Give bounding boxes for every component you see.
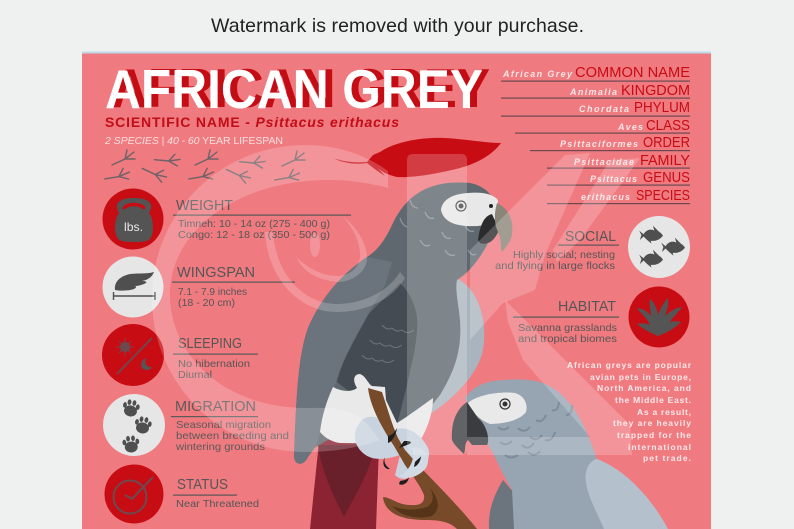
icon: habitat grass <box>628 286 690 348</box>
eye patch <box>467 392 527 424</box>
conservation paragraph: international <box>628 442 691 452</box>
taxonomy list: PHYLUM <box>634 99 690 116</box>
head scallops <box>400 200 476 255</box>
feet and branch <box>355 388 477 529</box>
beak <box>452 402 488 454</box>
foot <box>355 417 429 479</box>
weight text: Congo: 12 - 18 oz (350 - 500 g) <box>178 229 330 241</box>
watermark notice: Watermark is removed with your purchase. <box>211 15 584 37</box>
large parrot <box>294 182 512 529</box>
eye <box>500 399 510 409</box>
watermark K arm <box>470 153 590 340</box>
conservation paragraph: they are heavily <box>613 418 691 428</box>
icon: wingspan <box>102 256 164 318</box>
wingspan text: 7.1 - 7.9 inches <box>178 286 247 298</box>
watermark face <box>297 217 367 282</box>
eye <box>456 201 466 211</box>
tail inner <box>318 445 374 517</box>
pale wing <box>586 459 668 529</box>
white thigh <box>320 374 433 444</box>
sleeping text: Diurnal <box>178 369 212 381</box>
title: AFRICAN GREY <box>105 58 483 120</box>
tail <box>310 432 379 529</box>
nostril <box>489 204 493 208</box>
sleeping text: SLEEPING <box>178 335 242 352</box>
sleeping text <box>173 335 258 381</box>
branch <box>368 388 477 529</box>
icon: social fish <box>628 216 690 278</box>
social text: and flying in large flocks <box>495 260 615 272</box>
conservation paragraph: trapped for the <box>617 430 691 440</box>
conservation paragraph: pet trade. <box>643 453 691 463</box>
status text: Near Threatened <box>176 498 259 510</box>
icon: weight kettlebell <box>102 188 164 250</box>
title: AFRICAN GREY <box>112 57 490 119</box>
body <box>465 379 610 529</box>
conservation paragraph <box>567 360 692 463</box>
sleeping text: No hibernation <box>178 358 250 370</box>
migration text: MIGRATION <box>175 398 256 415</box>
claws <box>383 428 421 485</box>
status text <box>173 476 259 510</box>
social text <box>495 228 619 272</box>
watermark face ring <box>265 232 405 312</box>
wingspan text: (18 - 20 cm) <box>178 297 235 309</box>
outer wing <box>294 257 392 464</box>
weight text: WEIGHT <box>176 197 233 214</box>
panel background <box>82 52 711 529</box>
watermark overlay <box>152 145 640 455</box>
beak upper <box>495 203 512 252</box>
migration text: Seasonal migration <box>176 419 271 431</box>
social text: Highly social; nesting <box>513 249 615 261</box>
status text: STATUS <box>177 476 228 493</box>
migration text: between breeding and <box>176 430 289 442</box>
conservation paragraph: North America, and <box>597 383 691 393</box>
conservation paragraph: avian pets in Europe, <box>590 372 691 382</box>
habitat text: and tropical biomes <box>518 333 617 345</box>
watermark K stripe <box>553 158 640 262</box>
taxonomy list: Animalia <box>569 87 617 97</box>
scientific name: SCIENTIFIC NAME - Psittacus erithacus <box>105 114 399 130</box>
beak lower <box>478 214 499 244</box>
habitat text <box>513 298 619 345</box>
conservation paragraph: the Middle East. <box>615 395 691 405</box>
body and head <box>294 182 498 464</box>
dark inner wing <box>337 283 417 425</box>
taxonomy list: Psittacidae <box>574 157 634 167</box>
taxonomy list: FAMILY <box>640 152 690 169</box>
migration text <box>171 398 289 453</box>
taxonomy list: GENUS <box>643 169 690 186</box>
taxonomy list <box>501 64 690 204</box>
taxonomy list: Aves <box>617 122 643 132</box>
wingspan text <box>172 264 295 309</box>
social text: SOCIAL <box>565 228 616 245</box>
habitat text: Savanna grasslands <box>518 322 617 334</box>
scallops <box>498 402 572 458</box>
watermark K leg <box>467 300 632 455</box>
eye patch <box>441 193 498 226</box>
icon: status check <box>104 464 164 524</box>
taxonomy list: erithacus <box>581 192 630 202</box>
icon: weight kettlebell: lbs. <box>124 220 143 234</box>
taxonomy list: Psittaciformes <box>560 139 638 149</box>
wingspan text: WINGSPAN <box>177 264 255 281</box>
conservation paragraph: African greys are popular <box>567 360 692 370</box>
taxonomy list: KINGDOM <box>621 82 690 99</box>
weight text: Timneh: 10 - 14 oz (275 - 400 g) <box>178 218 330 230</box>
small parrot <box>452 379 668 529</box>
migration text: wintering grounds <box>175 441 265 453</box>
taxonomy list: COMMON NAME <box>575 64 690 81</box>
habitat text: HABITAT <box>558 298 616 315</box>
watermark C ring <box>152 145 388 452</box>
watermark K stem <box>407 154 467 455</box>
wing scallops <box>362 325 414 362</box>
upper foot <box>400 448 428 478</box>
taxonomy list: CLASS <box>646 117 690 134</box>
taxonomy list: Psittacus <box>590 174 637 184</box>
taxonomy list: ORDER <box>643 134 690 151</box>
taxonomy list: SPECIES <box>636 187 690 204</box>
taxonomy list: African Grey <box>502 69 573 79</box>
icon: migration paws <box>103 394 165 456</box>
species and lifespan: 2 SPECIES | 40 - 60 YEAR LIFESPAN <box>104 135 283 147</box>
taxonomy list: Chordata <box>579 104 629 114</box>
conservation paragraph: As a result, <box>637 407 691 417</box>
light belly <box>420 278 484 414</box>
bird tracks <box>105 147 305 187</box>
weight text <box>173 197 351 241</box>
branch shading <box>392 488 438 518</box>
icon: sleeping <box>102 324 164 386</box>
red feather <box>333 138 501 177</box>
dark wing <box>489 480 520 529</box>
watermark face dot <box>310 233 320 257</box>
